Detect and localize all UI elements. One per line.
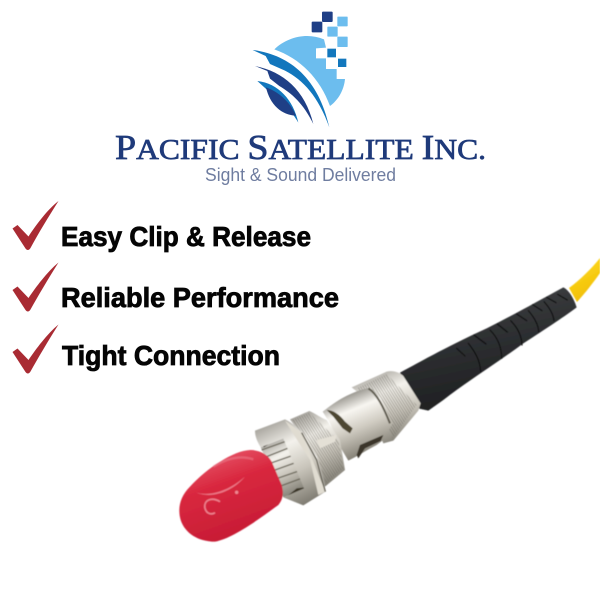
fiber optic ST connector bbox=[179, 258, 600, 542]
logo: swooshes bbox=[253, 50, 329, 127]
threaded stem bbox=[261, 438, 305, 497]
label: Tight Connection bbox=[62, 340, 280, 371]
front knurled ring bbox=[290, 411, 345, 487]
metal body bbox=[255, 371, 421, 505]
red dust cap bbox=[179, 450, 283, 542]
rear knurled ring bbox=[352, 371, 421, 443]
label: Reliable Performance bbox=[61, 282, 339, 313]
icon: check mark bbox=[12, 262, 58, 311]
check item 2 bbox=[12, 262, 339, 313]
tagline: Sight & Sound Delivered bbox=[205, 165, 396, 185]
icon: check mark bbox=[12, 324, 58, 373]
logo mark bbox=[253, 12, 348, 127]
logo: pixel squares bbox=[312, 12, 348, 67]
barrel bbox=[323, 388, 393, 461]
yellow cable bbox=[569, 258, 600, 302]
icon: check mark bbox=[12, 201, 58, 250]
check item 1 bbox=[12, 201, 311, 252]
company name: PACIFIC SATELLITE INC. bbox=[115, 128, 486, 167]
check item 3 bbox=[12, 324, 280, 373]
black strain relief boot bbox=[400, 287, 577, 411]
hex nut bbox=[255, 419, 325, 505]
logo: light blue globe bbox=[274, 36, 345, 106]
label: Easy Clip & Release bbox=[61, 221, 311, 252]
